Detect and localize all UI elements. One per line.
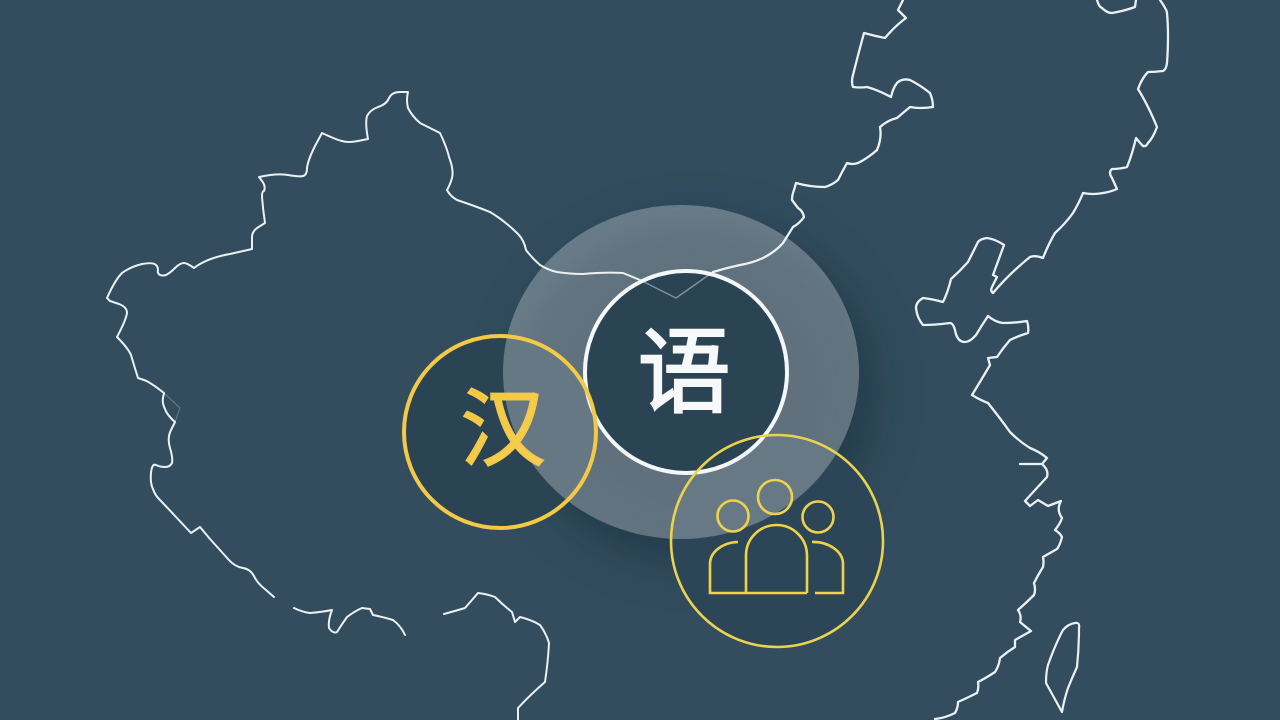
circle: Han character <box>404 336 596 528</box>
northern and western border <box>107 92 640 597</box>
fill: people circle backing <box>672 436 882 646</box>
right head <box>802 502 834 532</box>
faint western branch <box>164 393 180 422</box>
center body <box>746 525 807 593</box>
icon: group of people <box>710 480 843 593</box>
circle: language character <box>585 271 787 473</box>
character: yu: 语 <box>638 321 730 425</box>
eastern coast <box>916 0 1168 719</box>
fill: Han circle backing <box>404 336 596 528</box>
language circle ring <box>585 271 787 473</box>
drop shadow beneath central circles <box>513 220 877 564</box>
southern border fragment two <box>444 593 549 720</box>
left body and base line <box>710 542 807 593</box>
large translucent halo circle <box>503 205 859 539</box>
island outline <box>1046 623 1079 712</box>
southern border fragment one <box>294 608 405 635</box>
circle: people icon <box>671 435 883 647</box>
left head <box>718 500 748 532</box>
character: han: 汉 <box>460 383 546 478</box>
northern border towards the Bohai coast <box>713 0 933 272</box>
right body and base line <box>812 542 843 593</box>
center head <box>758 480 792 514</box>
faint section of border passing behind the language circle <box>640 272 713 298</box>
top northern fragment <box>1097 0 1136 13</box>
